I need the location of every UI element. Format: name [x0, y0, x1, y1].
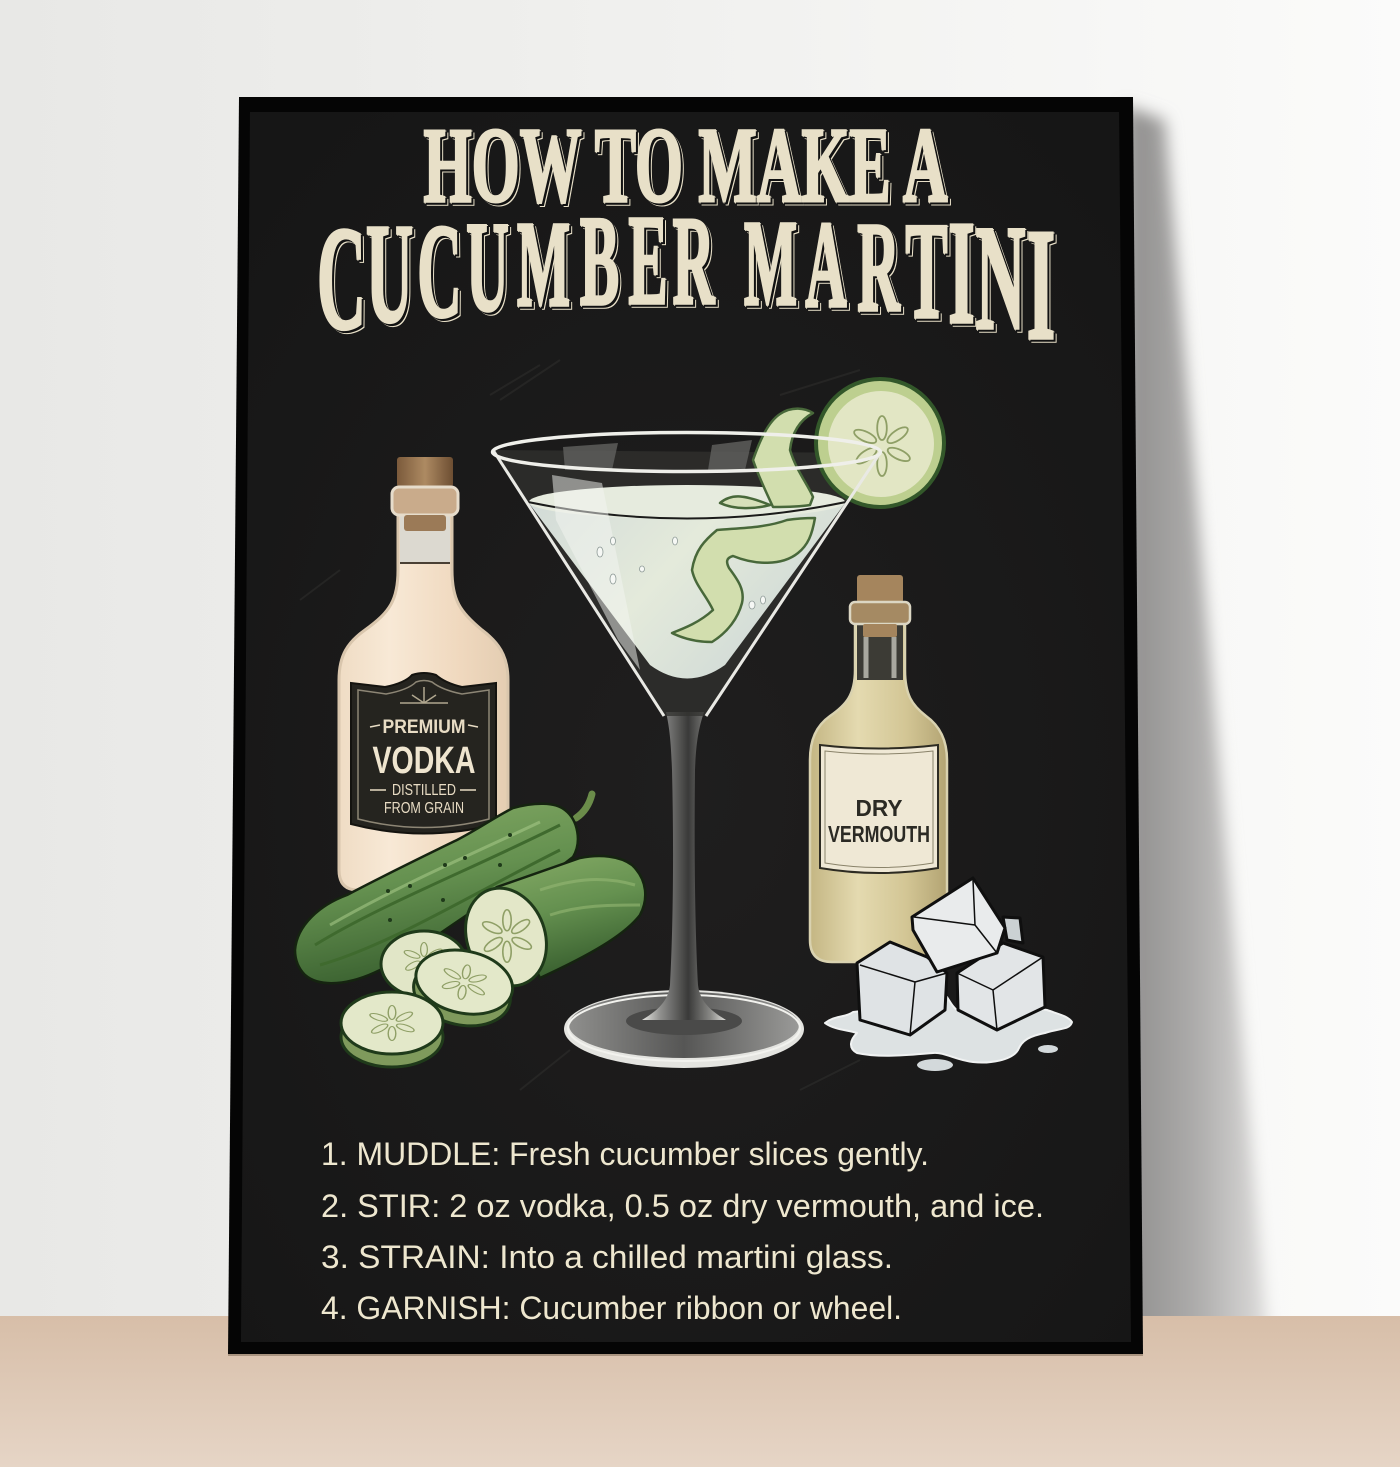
- foot: [564, 990, 804, 1068]
- liquid line: [400, 562, 450, 564]
- empty neck: [400, 515, 450, 563]
- vodka label: [351, 673, 496, 834]
- bottle collar: [850, 602, 910, 624]
- slice 1: [381, 931, 467, 997]
- stem: [642, 712, 726, 1020]
- title line 2: B: [580, 190, 619, 332]
- martini glass: [492, 377, 946, 1068]
- title: [317, 105, 1055, 373]
- bubbles: [597, 537, 766, 609]
- chalk streaks: [300, 360, 860, 1090]
- bowl outline: [493, 450, 880, 716]
- liquid: [528, 502, 846, 678]
- vodka label: VODKA: [372, 740, 476, 782]
- title line 2: U: [466, 196, 509, 338]
- chalkboard: [241, 112, 1131, 1342]
- step 4: 4. GARNISH: Cucumber ribbon or wheel.: [321, 1290, 902, 1326]
- vermouth label: [820, 745, 938, 873]
- title line 2: C: [417, 197, 462, 346]
- melt water: [825, 997, 1072, 1062]
- cut cucumber stripes: [540, 880, 640, 915]
- title line 2: T: [905, 195, 948, 348]
- back cucumber bumps: [386, 833, 512, 922]
- title line 2: M: [744, 195, 797, 331]
- cube back: [1003, 917, 1023, 943]
- cut face: [452, 877, 560, 997]
- floor shadow: [228, 1352, 1143, 1356]
- poster frame: [228, 97, 1143, 1354]
- bottle collar: [392, 487, 458, 515]
- cork: [397, 457, 453, 487]
- step 3: 3. STRAIN: Into a chilled martini glass.: [321, 1239, 893, 1275]
- frame shadow: [1125, 106, 1268, 1340]
- ice cubes: [825, 878, 1072, 1071]
- title line 2: U: [366, 195, 413, 352]
- wood floor: [0, 1316, 1400, 1467]
- bowl glass: [493, 450, 880, 716]
- cork lower: [863, 624, 897, 637]
- title line 2: I: [1027, 195, 1055, 373]
- vodka label: DISTILLED: [392, 782, 456, 799]
- rim: [492, 432, 880, 472]
- slice 3: [341, 1007, 443, 1067]
- title line 2: A: [805, 196, 847, 333]
- dry vermouth bottle: [810, 575, 947, 962]
- title line 1: HOW TO MAKE A: [423, 105, 948, 224]
- cucumbers: [295, 794, 645, 1067]
- bottle body: [810, 623, 947, 962]
- glass highlights: [563, 440, 752, 470]
- cork: [857, 575, 903, 603]
- liquid highlight: [552, 475, 640, 670]
- cucumber stem: [576, 794, 592, 818]
- neck highlight: [866, 637, 894, 678]
- cube top: [912, 878, 1005, 972]
- neck dark section: [857, 623, 903, 680]
- vodka label: FROM GRAIN: [384, 800, 464, 817]
- title line 2: M: [517, 196, 570, 332]
- cut cucumber: [497, 856, 645, 978]
- bottle body: [339, 515, 508, 890]
- vermouth label: DRY: [856, 795, 902, 821]
- title line 2: R: [673, 193, 715, 331]
- melt drops: [917, 1059, 953, 1071]
- step 1: 1. MUDDLE: Fresh cucumber slices gently.: [321, 1136, 929, 1172]
- cube right: [957, 943, 1045, 1030]
- title line 2: R: [857, 196, 900, 338]
- back cucumber stripes: [315, 825, 560, 965]
- cork lower: [404, 515, 446, 531]
- cucumber ribbon: [672, 409, 815, 642]
- slice 2: [407, 942, 519, 1034]
- back whole cucumber: [295, 804, 578, 983]
- cube left: [857, 942, 947, 1035]
- title line 2: C: [317, 196, 366, 360]
- title line 2: N: [976, 196, 1025, 361]
- title line 2: I: [948, 190, 975, 354]
- vodka label: PREMIUM: [382, 717, 466, 738]
- vermouth label: VERMOUTH: [828, 821, 930, 847]
- title line 2: E: [628, 189, 668, 331]
- vodka bottle: [339, 457, 508, 890]
- step 2: 2. STIR: 2 oz vodka, 0.5 oz dry vermouth, and ice.: [321, 1188, 1044, 1224]
- cucumber wheel: [814, 377, 946, 509]
- instruction steps: [321, 1136, 1044, 1326]
